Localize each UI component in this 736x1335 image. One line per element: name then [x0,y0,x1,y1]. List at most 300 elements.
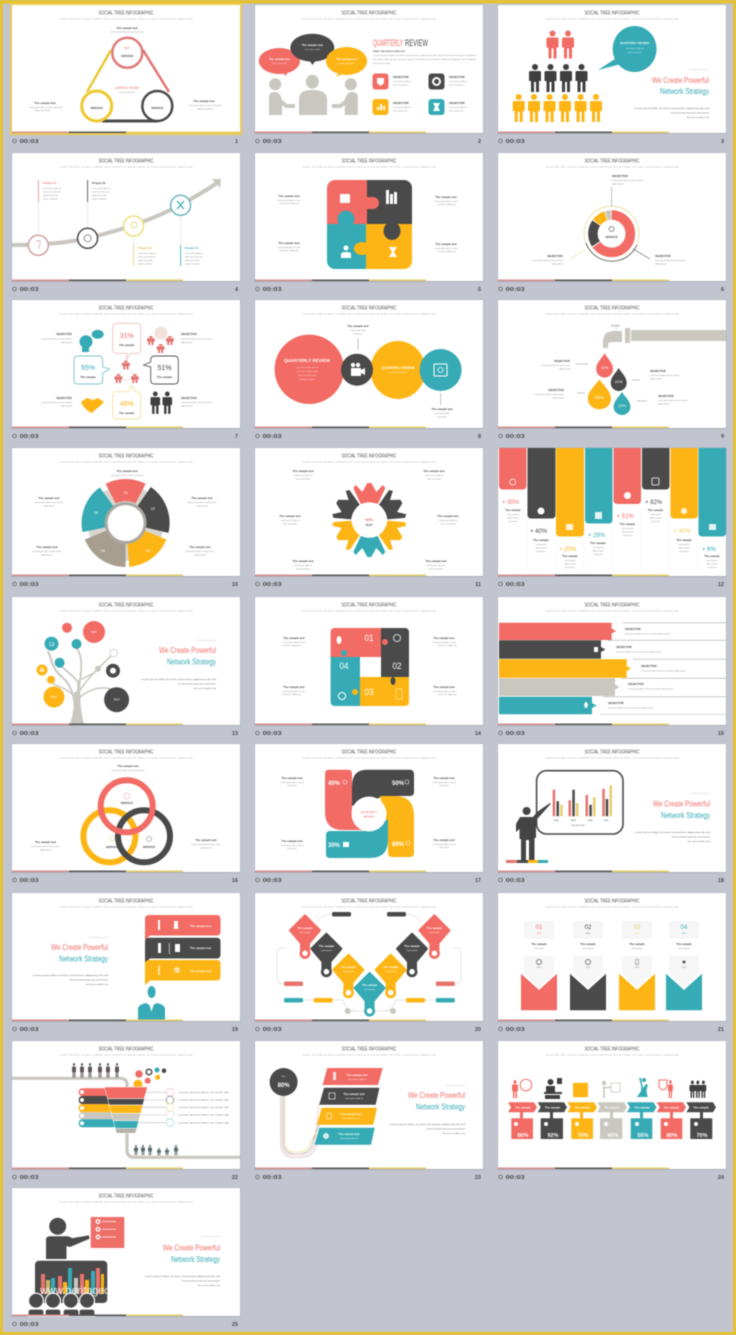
value box 55% [631,1118,652,1139]
objective: teal [428,99,468,115]
headline text [653,792,710,820]
pictogram: shield and person [659,1080,673,1098]
objective top left: OBJECTIVE [56,332,72,336]
label bottom right: Lorem ipsum dolor sit amet [433,843,456,846]
objective bottom left: OBJECTIVE [56,396,72,400]
label top right: The sample text [433,776,455,780]
footer bar [255,1168,426,1169]
slide heading [302,306,436,316]
slide heading: SOCIAL TREE INFOGRAPHIC [584,602,640,608]
slide heading: SOCIAL TREE INFOGRAPHIC [584,158,640,164]
bar: grey: OBJECTIVE [628,682,644,686]
slide heading: SOCIAL TREE INFOGRAPHIC [342,1046,397,1052]
label top left: The sample text [278,194,300,198]
text: yellow drop: Lorem ipsum dolor sit amet consec [535,393,564,396]
envelope: yellow [619,956,655,1010]
footer bar [498,574,669,576]
box: left 55%: 55% [81,365,95,372]
headline text: Network Strategy [171,1255,220,1264]
label bottom right: consectetur adipiscing [438,693,456,696]
label tabs [284,912,455,1002]
box: right 51% [144,356,178,384]
project 3 text: Lorem ipsum dolor sit [138,252,157,255]
label top right: Lorem ipsum dolor sit amet [433,781,456,784]
slide heading [60,602,192,612]
footer bar [255,426,426,428]
slide 17: four block swirl [254,744,484,884]
slide heading: Insert the title of your subtitle here and lorem ipsum dolor sit amet consectetur adipiscing [546,312,678,316]
slide heading: SOCIAL TREE INFOGRAPHIC [342,898,397,904]
left objective text: adipiscing elit [552,262,563,266]
tab: yellow: Lorem ipsum dolor sit [342,1117,361,1120]
bar chart [553,785,612,827]
icon: handshake [81,398,104,413]
headline text: Network Strategy [167,658,216,666]
label top left: Lorem ipsum dolor sit amet [283,641,306,644]
objective top right: OBJECTIVE [181,332,197,336]
project 4 text: Project 04 [185,246,199,250]
label upper right [187,496,217,508]
column 8 [698,448,726,569]
slide heading: Insert the title of your subtitle here and lorem ipsum dolor sit amet consectetur adipiscing [546,906,678,908]
knob: dark [384,222,400,240]
headline text [652,68,709,96]
circle: coral: QUARTERLY REVIEW [284,358,330,363]
label top left: The sample text [292,469,314,473]
timing and number [13,287,239,293]
diamond: coral left [290,915,320,958]
label top: The sample text [116,469,138,473]
circle: dark camera [341,354,373,386]
objective: yellow: OBJECTIVE [393,101,409,105]
block: teal 30% [326,819,388,858]
body text: Lorem ipsum dolor sit amet consectetur adipiscing elit sed [390,1123,465,1126]
label bottom left: The sample text [292,559,314,563]
slide heading: Insert the title of your subtitle here and lorem ipsum dolor sit amet consectetur adipiscing [60,312,192,316]
value box 92% [541,1118,563,1139]
presentation board [537,771,623,834]
left objective text: Lorem ipsum dolor sit amet consecte [532,259,563,262]
project 2 text [87,180,111,202]
objective: dark: amet consectetur [449,84,464,86]
drop: teal [614,392,630,415]
slide heading: SOCIAL TREE INFOGRAPHIC [98,10,154,16]
bar: yellow: Lorem ipsum dolor sit amet consectetur adipiscing elit [641,670,686,672]
footer bar [12,724,183,725]
ring captions: SERVICE [121,801,133,805]
slide heading: Insert the title of your subtitle here and lorem ipsum dolor sit amet consectetur adipiscing [60,756,192,760]
footer bar [12,426,183,428]
slide heading [60,10,192,20]
label lower right [185,545,215,556]
connector lines [570,187,650,259]
slide heading [546,898,678,908]
slide heading [60,898,192,908]
column 5: + 51% [616,514,634,520]
node: grey [95,666,101,672]
slide 1: triangle of rings [10,3,242,145]
bubble: coral [259,48,300,76]
objective top right: adipiscing elit [181,341,193,344]
slide heading: SOCIAL TREE INFOGRAPHIC [584,10,640,16]
slide heading: Insert the title of your subtitle here and lorem ipsum dolor sit amet consectetur adipiscing [302,460,436,464]
bubble: coral: The sample text [269,57,290,61]
connector lines [576,364,647,401]
slide 25: presenter and audience [12,1188,240,1328]
icon: two men [150,392,172,414]
label upper left: The sample text [38,496,60,500]
column 5: The sample [620,522,636,526]
top pictograms [512,1078,706,1099]
card 04: 04 [681,925,688,931]
pictogram: yellow block [573,1083,588,1097]
label bottom left [282,685,306,696]
block: teal 30%: 30% [328,843,341,849]
body text: Ut enim ad minim veniam quis nostrud exercit [671,112,709,114]
timing and number: 15 [718,731,724,737]
project 4 text [180,245,204,266]
label lower left: The sample text [36,545,58,549]
value box 40% [600,1118,622,1139]
slide heading: SOCIAL TREE INFOGRAPHIC [342,306,397,312]
connector lines [358,338,441,405]
column 6: consectetur [651,520,661,523]
review body [373,51,477,65]
text: yellow drop [535,388,564,400]
label middle right: The sample text [437,514,459,518]
top label [111,764,145,772]
top objective text: OBJECTIVE [612,174,628,178]
step 2 marker [78,228,98,248]
timing and number: 00:03 [20,878,39,884]
timing and number [499,731,724,737]
envelope: coral: TEXT [537,967,542,969]
footer bar [498,426,669,428]
right objective text: Lorem ipsum dolor sit amet consecte [655,259,686,262]
label lower left: Lorem ipsum dolor sit amet consec [32,550,62,553]
column 3: + 20% [559,547,577,553]
ring captions: SERVICE [106,845,118,849]
label top left: The sample text [281,776,303,780]
timing and number: 3 [721,139,724,145]
diamond: yellow right: The sample [383,965,399,969]
footer bar [12,1020,183,1021]
timing and number [256,1175,481,1181]
jigsaw puzzle [327,180,412,269]
slide heading: SOCIAL TREE INFOGRAPHIC [342,10,397,16]
tab: teal [315,1128,375,1145]
slide 8: four overlapping circles [254,300,484,440]
top label [347,324,369,336]
segmented wheel [81,479,170,567]
body text: Ut enim ad minim veniam quis nostrud exercit [70,978,108,982]
tab: yellow: The sample text [190,969,211,973]
slide 14: square puzzle [254,596,484,737]
headline text [159,639,216,666]
footer bar [498,724,669,725]
label bottom right: The sample text [425,559,447,563]
left label: Lorem ipsum dolor sit amet consectetur [29,106,63,109]
dark value circle: 80% [278,1083,290,1089]
slide 6: donut chart [498,152,726,293]
objective top left: Lorem ipsum dolor sit amet consecte [41,338,72,340]
card 03: 03 [634,925,641,931]
timing and number: 14 [475,731,482,737]
timing and number: 11 [475,582,481,588]
body text: Duis aute irure dolor in rep [198,1284,220,1287]
body text: Duis aute irure dolor in rep [688,840,710,843]
block: coral 40% [325,770,370,830]
timing and number: 22 [232,1175,238,1181]
water tap [603,325,726,348]
chart axis labels [554,819,609,827]
column 5: dolor sit amet [622,530,634,534]
column 4: consectetur [593,553,603,556]
label bottom left: Lorem ipsum dolor sit amet [278,246,301,249]
grey pipes [12,1078,240,1157]
centre value: 40% [365,517,373,522]
bar: yellow: OBJECTIVE [641,664,657,668]
label top right: Lorem ipsum dolor sit amet [435,200,458,203]
timing and number [256,878,481,884]
label bottom left: amet consectetur [296,568,311,570]
slide 23: curved lines and slanted tabs [254,1040,484,1181]
project 1 text [38,180,62,202]
slide heading [546,306,678,316]
node: outline [110,649,117,657]
label top right: consectetur adipiscing [438,644,456,647]
label bottom right: consectetur [439,846,449,849]
piece 03: yellow [360,677,409,706]
card 01 [524,921,554,950]
piece 01: coral: 01 [364,633,374,643]
headline text: Insert the title here text [197,639,216,642]
top label: consectetur [353,332,363,336]
bubble: dark: The sample text [302,43,323,47]
timing and number [13,434,238,440]
slide heading: Insert the title of your subtitle here and lorem ipsum dolor sit amet consectetur adipiscing [546,166,678,168]
headline text: Network Strategy [660,87,709,96]
timing and number: 17 [475,878,481,884]
node: teal small [72,639,82,649]
tab: coral: The sample text [190,924,211,928]
slide 22: sales funnel [12,1040,240,1181]
column 2: + 40% [530,529,548,535]
label top right: The sample text [423,469,445,473]
box: right 51%: 51% [157,365,172,372]
circle: coral: sed do eiusmod tempor [297,374,317,377]
headline text: We Create Powerful [159,646,216,655]
column 3: The sample [562,554,578,558]
label bottom right: The sample text [433,838,455,842]
card 04 [669,921,699,950]
dark people [529,64,588,92]
column 7: Lorem ipsum [679,543,690,546]
pictogram: three people [690,1080,706,1098]
centre caption: QUARTERLY REVIEW [115,85,139,90]
label middle right: Lorem ipsum dolor sit [439,519,458,522]
timing and number [13,582,238,588]
timing and number: 16 [232,878,238,884]
objective bottom left: Lorem ipsum dolor sit amet consecte [41,401,72,404]
diamond: teal centre: Lorem ipsum [364,988,375,991]
timing and number: 13 [232,731,238,737]
tree trunk and branches [48,647,116,724]
idea circles [134,1068,166,1089]
label top right: Lorem ipsum dolor sit amet [433,641,456,644]
label upper left [34,496,64,508]
circle: coral [275,335,344,404]
slide heading: Insert the title of your subtitle here and lorem ipsum dolor sit amet consectetur adipiscing [60,18,192,20]
top label: Lorem ipsum dolor sit amet consectetur [110,30,144,34]
node: dark mid [106,664,120,678]
bar: yellow [499,659,726,678]
review body: Duis aute irure dolor [373,62,390,65]
text: coral drop [541,359,570,370]
node: yellow large: TEXT [51,696,58,699]
value box 80%: 80% [517,1133,529,1139]
right objective text [655,254,686,266]
slide heading [302,1046,436,1056]
label top right: consectetur adipiscing [437,203,455,206]
bottom label: consectetur [437,416,447,418]
label top right: amet consectetur [427,478,442,480]
label bottom left: The sample text [281,839,303,843]
column 8: The sample [704,554,720,558]
card 02: TEXT [586,933,591,935]
column 7: The sample [676,538,692,542]
column 3: dolor sit amet [564,562,576,566]
dark bars [556,790,608,816]
label top left [278,194,301,205]
right label: adipiscing elit sed [198,108,212,110]
footer bar [498,280,669,281]
timing and number: 00:03 [20,287,39,293]
circle: yellow: QUARTERLY REVIEW [382,366,415,370]
slide heading: SOCIAL TREE INFOGRAPHIC [342,750,397,756]
column 6: dolor sit amet [650,516,662,520]
slide heading [60,454,192,464]
right objective text: adipiscing elit [655,262,667,266]
wheel numbers: 04 [101,549,105,553]
right label: Lorem ipsum dolor sit amet consec [191,843,221,846]
timing and number: 00:03 [506,1027,525,1033]
teal speech bubble [598,26,657,72]
project 4 text: Lorem ipsum dolor sit [185,252,204,255]
headline text: Insert the title here text [691,792,710,795]
text: teal drop: Lorem ipsum dolor sit amet consec [658,399,687,402]
label bottom left: Lorem ipsum dolor sit amet [281,844,304,847]
ring: top: TEXT [124,47,131,50]
footer bar [498,870,669,872]
objective: coral: OBJECTIVE [393,75,409,79]
timing and number: 00:03 [506,878,525,884]
column 1: + 30% [502,500,520,506]
slide 18: presenter with bar chart [498,744,726,884]
timing and number: 00:03 [20,1322,39,1328]
drop: yellow: 60% [595,395,604,400]
objective bottom right [181,396,212,408]
icon: people group [147,326,174,353]
slide heading: Insert the title of your subtitle here and lorem ipsum dolor sit amet consectetur adipiscing [546,756,678,760]
body text: Lorem ipsum dolor sit amet consectetur adipiscing elit sed [145,1275,220,1278]
walking people bottom [134,1145,178,1155]
top objective text: adipiscing elit [612,182,624,186]
timing and number: 20 [475,1027,481,1033]
diamond: yellow left: Lorem ipsum [343,970,354,973]
teal speech bubble: amet consectetur [627,51,642,54]
bar: grey: Lorem ipsum dolor sit amet consectetur adipiscing elit [628,688,673,690]
label upper right: The sample text [191,496,213,500]
label middle left: Lorem ipsum dolor sit [281,519,300,522]
project 4 text: tempor incididunt [185,262,200,266]
label lower right: adipiscing elit [194,554,206,556]
text: teal drop: adipiscing elit [658,402,670,406]
envelope: teal [666,956,702,1010]
label bottom right: Lorem ipsum dolor sit amet [433,690,456,693]
label top: Lorem ipsum dolor sit amet consectetur [110,474,144,477]
slide heading [546,1046,678,1056]
slide heading: SOCIAL TREE INFOGRAPHIC [98,750,154,756]
teal speech bubble: QUARTERLY REVIEW [620,41,649,45]
text: dark drop: OBJECTIVE [650,369,666,373]
headline text: Insert the title here text [201,1235,220,1238]
piece 01: coral [331,628,381,657]
right objective text: OBJECTIVE [655,254,671,258]
diamond: dark left [311,934,341,976]
tree circles [36,621,129,712]
timing and number [13,878,238,884]
label top right: consectetur [439,784,449,787]
bar: dark: Lorem ipsum dolor sit amet consectetur adipiscing elit [616,650,661,654]
label bottom right [435,242,458,253]
piece icons [340,190,397,258]
chevron captions: The sample [515,1105,531,1109]
wheel numbers [94,491,155,553]
timing and number: 00:03 [263,434,282,440]
coral people [546,30,574,58]
slide heading [302,750,436,760]
column 6: Lorem ipsum [650,513,661,516]
slide heading: Insert the title of your subtitle here and lorem ipsum dolor sit amet consectetur adipiscing [546,1054,678,1056]
tab: coral [145,915,220,940]
circle: yellow: Lorem ipsum dolor sit [389,371,408,374]
bubble: dark [290,34,334,65]
headline text: Insert the title here text [690,68,709,71]
body text: Ut enim ad minim veniam quis nostrud exercit [178,682,216,686]
text: coral drop: OBJECTIVE [554,359,570,363]
chart axis labels: DATA [571,819,576,822]
timing and number: 24 [718,1175,725,1181]
timing and number [499,1027,724,1033]
column 1: dolor sit amet [507,516,519,520]
tab: dark: The sample text [343,1092,365,1096]
column 2: Lorem ipsum [536,543,547,546]
funnel steps on right: Lorem ipsum dolor sit amet elit [179,1114,230,1117]
footer bar [12,1314,183,1316]
column 7 [670,448,698,553]
timing and number [13,731,238,737]
column 8: + 6% [702,547,717,553]
project 2 text: Project 02 [92,181,106,185]
yellow people [513,94,602,122]
circle: teal photo [420,349,462,391]
dark value circle [270,1068,298,1096]
piece: yellow [366,224,412,269]
centre caption: Insert the title here [119,91,135,94]
slide heading: Insert the title of your subtitle here and lorem ipsum dolor sit amet consectetur adipiscing [302,1054,436,1056]
text: teal drop: OBJECTIVE [658,394,674,398]
